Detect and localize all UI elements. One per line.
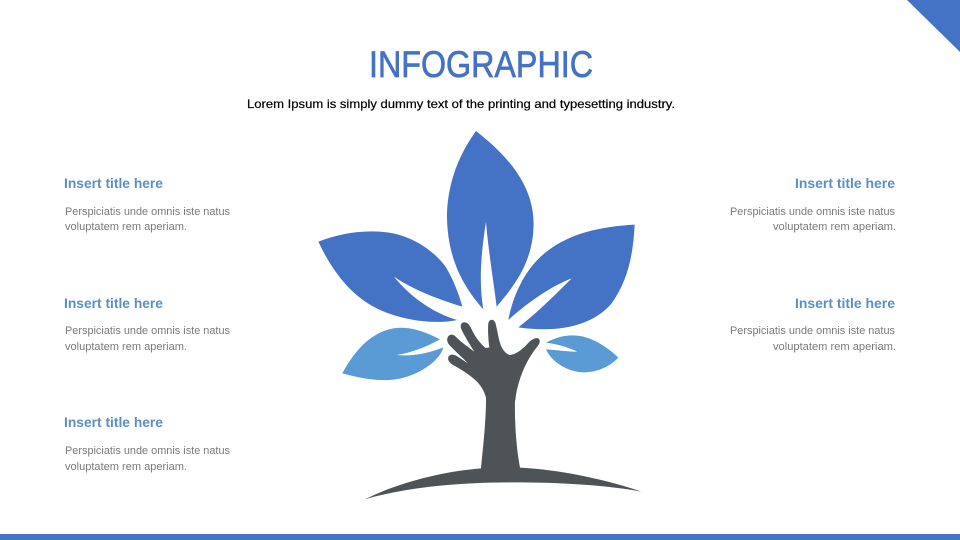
text block: left 2: Perspiciatis unde omnis iste natus: [65, 325, 230, 337]
text block: right 2: voluptatem rem aperiam.: [773, 341, 896, 353]
leaf: top centre: [447, 131, 534, 309]
leaf: upper left: [318, 231, 462, 322]
leaf: upper right: [508, 225, 635, 329]
text block: right 1: voluptatem rem aperiam.: [773, 221, 896, 233]
subtitle: Lorem Ipsum is simply dummy text of the printing and typesetting industry.: [247, 97, 675, 111]
text block: left 3: voluptatem rem aperiam.: [65, 461, 187, 473]
text block: left 1: [64, 175, 230, 233]
leaf: lower right: [546, 335, 618, 372]
text block: left 1: Insert title here: [64, 175, 163, 191]
text block: right 1: Perspiciatis unde omnis iste natus: [730, 206, 895, 218]
text block: left 3: Insert title here: [64, 414, 163, 430]
text block: right 2: Insert title here: [795, 295, 895, 311]
text block: right 1: [730, 175, 896, 233]
text block: right 2: [730, 295, 896, 353]
text block: left 2: Insert title here: [64, 295, 163, 311]
text block: right 2: Perspiciatis unde omnis iste natus: [730, 325, 895, 337]
leaf: lower left: [342, 328, 443, 380]
text block: left 2: voluptatem rem aperiam.: [65, 341, 187, 353]
text block: left 1: voluptatem rem aperiam.: [65, 221, 187, 233]
text block: left 3: [64, 414, 230, 473]
text block: left 3: Perspiciatis unde omnis iste natus: [65, 445, 230, 457]
text block: left 1: Perspiciatis unde omnis iste natus: [65, 206, 230, 218]
trunk and ground: [365, 390, 642, 499]
bottom bar: [0, 534, 960, 540]
text block: left 2: [64, 295, 230, 353]
corner triangle: [907, 0, 960, 52]
tree illustration: [318, 131, 642, 499]
hand: [447, 320, 540, 401]
title: INFOGRAPHIC: [369, 44, 593, 85]
text block: right 1: Insert title here: [795, 175, 895, 191]
